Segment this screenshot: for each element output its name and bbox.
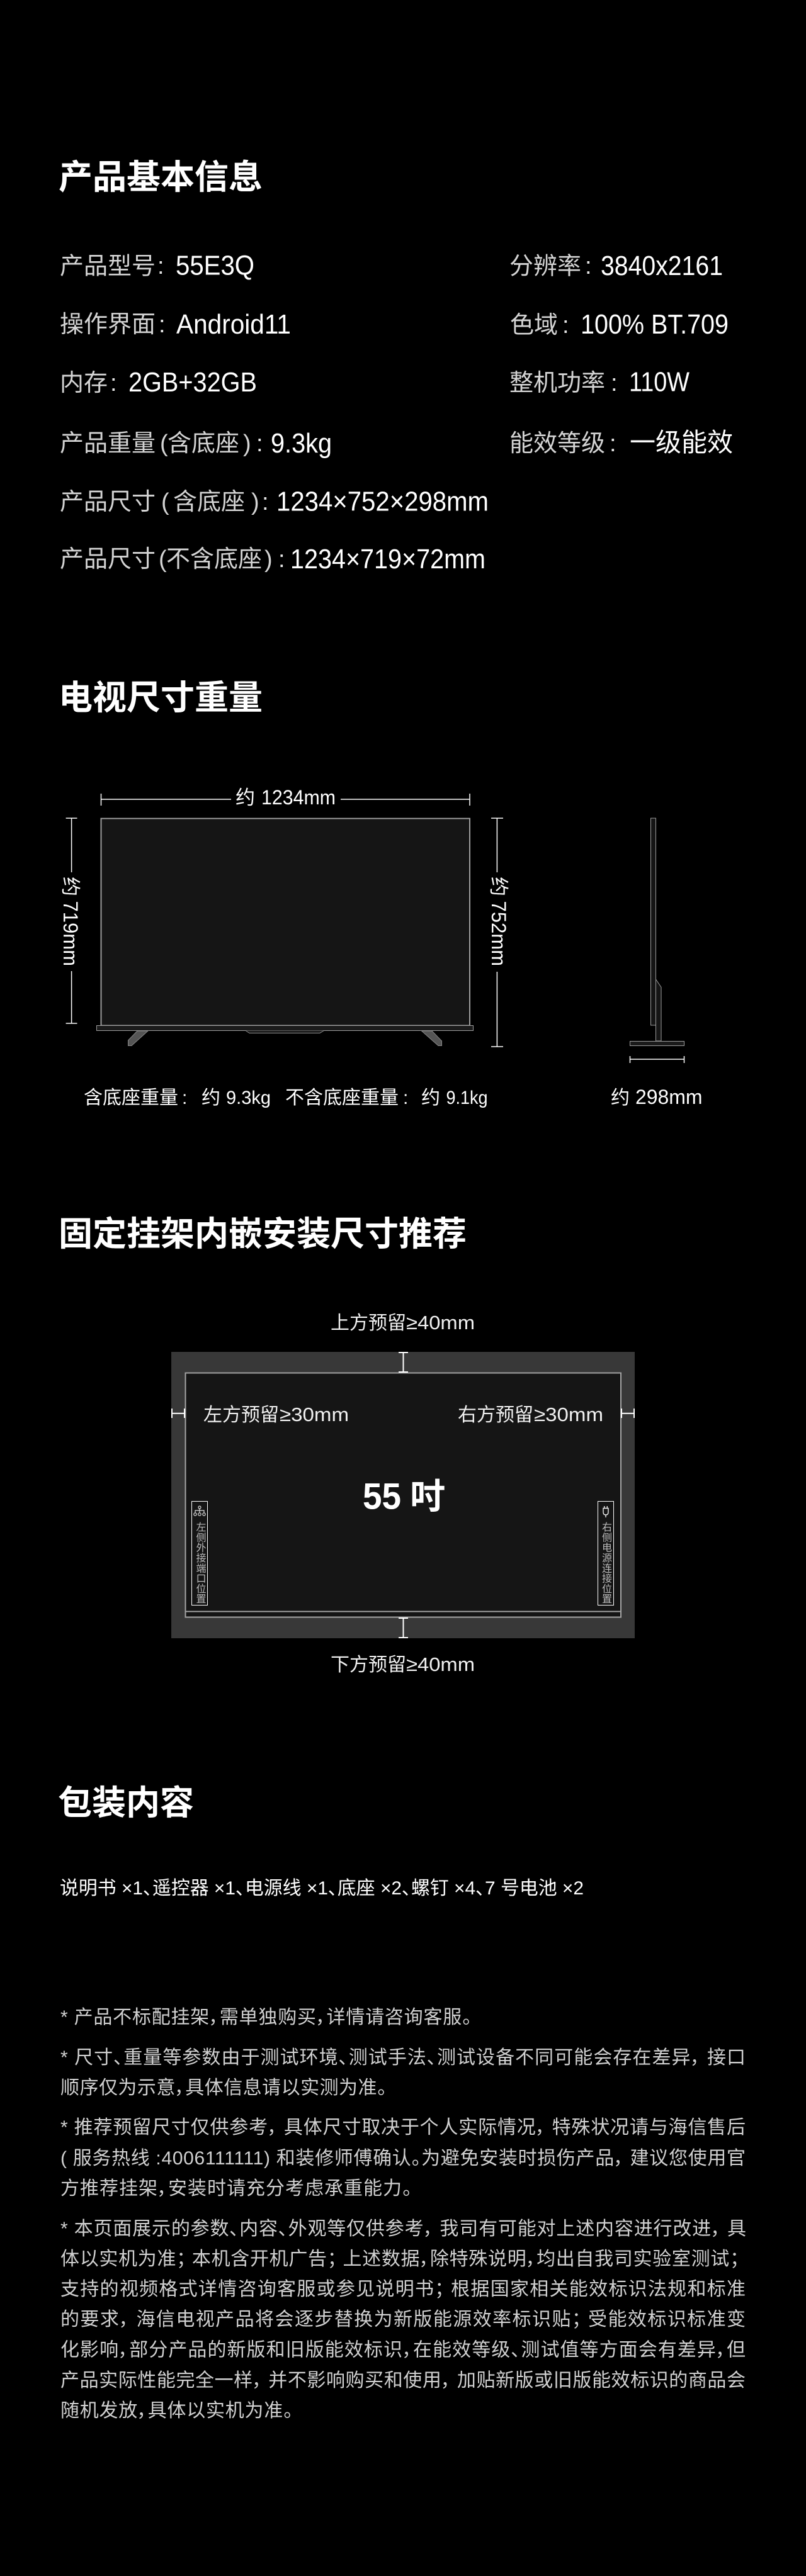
label: left clearance: ≥30mm	[280, 1403, 349, 1426]
spec: memory	[60, 367, 257, 398]
spec: energy grade: 能效等级	[509, 430, 605, 457]
TV front view	[97, 818, 474, 1046]
spec: memory: 2GB+32GB	[128, 367, 257, 398]
spec: size with stand: :	[262, 489, 269, 515]
spec: power: :	[611, 370, 618, 397]
marker: left clearance	[172, 1409, 184, 1418]
spec: power: 110W	[629, 367, 690, 398]
spec: size with stand	[60, 486, 489, 517]
panel: TV size and weight	[59, 679, 703, 1108]
note 4: 化影响，部分产品的新版和旧版能效标识，在能效等级、测试值等方面会有差异，但	[60, 2340, 746, 2360]
depth label: 298mm	[635, 1086, 703, 1108]
dimension: height with stand: 752mm	[487, 901, 510, 966]
weight without stand: 不含底座重量	[285, 1088, 399, 1108]
weight with stand: 9.3kg	[226, 1088, 271, 1108]
spec: model: 产品型号	[60, 253, 156, 279]
note 4: 支持的视频格式详情咨询客服或参见说明书； 根据国家相关能效标识法规和标准	[60, 2279, 746, 2300]
dimension: height without stand: 约	[59, 877, 81, 896]
label: bottom clearance: 下方预留	[331, 1655, 406, 1675]
icon: power plug	[603, 1506, 608, 1517]
weight without stand: 约	[421, 1088, 440, 1108]
label: bottom clearance	[331, 1653, 475, 1675]
label: left clearance: 左方预留	[203, 1405, 279, 1426]
wall recess area	[171, 1352, 635, 1638]
note 2: 顺序仅为示意，具体信息请以实测为准。	[60, 2078, 387, 2098]
text: package list: 说明书 ×1、遥控器 ×1、电源线 ×1、底座 ×2、螺钉 ×4、7 号电池 ×2	[60, 1878, 584, 1899]
spec: size without stand: 1234×719×72mm	[290, 544, 485, 575]
spec: size with stand: (	[161, 489, 169, 515]
weight with stand: 约	[202, 1088, 220, 1108]
weight without stand: :	[403, 1088, 408, 1108]
spec: size without stand: 产品尺寸	[60, 546, 156, 573]
dimension: width: 约	[236, 787, 255, 809]
spec: color gamut: 100% BT.709	[581, 309, 729, 340]
label: top clearance: 上方预留	[331, 1313, 406, 1334]
spec: model	[60, 250, 254, 281]
note 3: ( 服务热线 :4006111111) 和装修师傅确认。为避免安装时损伤产品， 建议您使用官	[60, 2148, 746, 2169]
spec: size with stand: 1234×752×298mm	[276, 486, 489, 517]
spec: size without stand: (	[159, 546, 167, 573]
heading: basic info: 产品基本信息	[59, 159, 263, 196]
dimension: height without stand	[59, 818, 82, 1023]
TV side view	[630, 818, 684, 1046]
spec: weight with stand: 9.3kg	[271, 428, 332, 459]
spec: operating interface: 操作界面	[60, 312, 156, 338]
spec: power	[509, 367, 690, 398]
note 3: 方推荐挂架，安装时请充分考虑承重能力。	[60, 2178, 412, 2199]
spec: size with stand: )	[251, 489, 259, 515]
spec: color gamut: 色域	[510, 312, 558, 339]
spec: weight with stand: 产品重量	[60, 430, 156, 457]
spec: color gamut: :	[562, 312, 569, 339]
dimension: width: 1234mm	[261, 786, 336, 809]
spec: model: :	[157, 253, 164, 279]
note 3: * 推荐预留尺寸仅供参考， 具体尺寸取决于个人实际情况， 特殊状况请与海信售后	[60, 2117, 746, 2138]
spec: weight with stand: 含底座	[167, 430, 239, 457]
note 4: * 本页面展示的参数、内容、外观等仅供参考， 我司有可能对上述内容进行改进， 具	[60, 2219, 746, 2239]
label: 55 inch: 55	[363, 1476, 401, 1517]
label: top clearance	[331, 1312, 475, 1334]
label: right clearance	[458, 1403, 603, 1426]
spec: power: 整机功率	[509, 370, 605, 397]
spec: energy grade: :	[610, 430, 616, 457]
heading: wall mount recess size: 固定挂架内嵌安装尺寸推荐	[59, 1215, 467, 1253]
panel: footnotes	[60, 2007, 746, 2421]
spec: energy grade: 一级能效	[630, 428, 733, 457]
dimension: height without stand: 719mm	[59, 901, 82, 966]
label: bottom clearance: ≥40mm	[406, 1653, 475, 1675]
spec: size without stand: )	[264, 546, 273, 573]
callout: left ports: 左侧外接端口位置	[194, 1522, 207, 1604]
note 4	[60, 2219, 746, 2421]
icon: port network	[194, 1506, 205, 1516]
weight with stand: 含底座重量	[84, 1088, 178, 1108]
spec: resolution: 分辨率	[509, 253, 581, 279]
marker: top clearance	[399, 1353, 408, 1372]
spec: resolution: :	[585, 253, 592, 279]
marker: right clearance	[622, 1409, 634, 1418]
heading: package contents: 包装内容	[58, 1784, 194, 1822]
panel: basic product info	[59, 159, 733, 575]
spec: size with stand: 含底座	[173, 489, 245, 515]
label: right clearance: 右方预留	[458, 1405, 533, 1426]
spec: weight with stand: (	[160, 430, 168, 457]
spec: weight with stand: )	[243, 430, 251, 457]
spec: memory: :	[110, 370, 117, 397]
spec: size without stand: :	[278, 546, 285, 573]
depth label: 约	[611, 1088, 630, 1108]
spec: operating interface: Android11	[176, 309, 291, 340]
dimension: width	[101, 786, 470, 809]
label: top clearance: ≥40mm	[406, 1312, 475, 1334]
dimension: height with stand: 约	[487, 877, 509, 896]
callout: right power	[598, 1502, 613, 1605]
label: 55 inch: 吋	[410, 1476, 445, 1516]
note 4: 体以实机为准； 本机含开机广告； 上述数据，除特殊说明，均出自我司实验室测试；	[60, 2249, 739, 2269]
weight without stand	[285, 1088, 487, 1108]
note 3	[60, 2117, 746, 2199]
spec: resolution: 3840x2161	[601, 250, 723, 281]
note 4: 的要求， 海信电视产品将会逐步替换为新版能源效率标识贴； 受能效标识标准变	[60, 2309, 746, 2330]
dimension: height with stand	[487, 818, 510, 1047]
marker: bottom clearance	[399, 1618, 408, 1638]
spec: color gamut	[510, 309, 729, 340]
spec: operating interface	[60, 309, 291, 340]
dimension: depth	[630, 1056, 684, 1063]
note 4: 产品实际性能完全一样， 并不影响购买和使用， 加贴新版或旧版能效标识的商品会	[60, 2370, 746, 2391]
note 2	[60, 2047, 746, 2098]
spec: weight with stand: :	[256, 430, 263, 457]
note 4: 随机发放，具体以实机为准。	[60, 2400, 293, 2421]
callout: left ports	[191, 1502, 208, 1605]
note 1: * 产品不标配挂架，需单独购买，详情请咨询客服。	[60, 2007, 472, 2028]
spec: size without stand	[60, 544, 485, 575]
spec: energy grade	[509, 428, 733, 457]
heading: TV size and weight: 电视尺寸重量	[59, 679, 263, 717]
spec: weight with stand	[60, 428, 332, 459]
callout: right power: 右侧电源连接位置	[600, 1522, 612, 1604]
panel: package contents	[58, 1784, 584, 1899]
weight with stand	[84, 1088, 271, 1108]
spec: size with stand: 产品尺寸	[60, 489, 156, 515]
spec: operating interface: :	[159, 312, 166, 338]
panel: wall mount recess size	[59, 1215, 635, 1675]
spec: resolution	[509, 250, 723, 281]
weight without stand: 9.1kg	[446, 1088, 487, 1108]
spec: memory: 内存	[60, 370, 108, 397]
label: left clearance	[203, 1403, 349, 1426]
label: 55 inch	[363, 1476, 445, 1517]
TV outline	[185, 1373, 621, 1617]
note 2: * 尺寸、重量等参数由于测试环境、测试手法、测试设备不同可能会存在差异， 接口	[60, 2047, 746, 2068]
weight with stand: :	[182, 1088, 187, 1108]
spec: size without stand: 不含底座	[166, 546, 262, 573]
spec: model: 55E3Q	[176, 250, 254, 281]
label: right clearance: ≥30mm	[534, 1403, 603, 1426]
